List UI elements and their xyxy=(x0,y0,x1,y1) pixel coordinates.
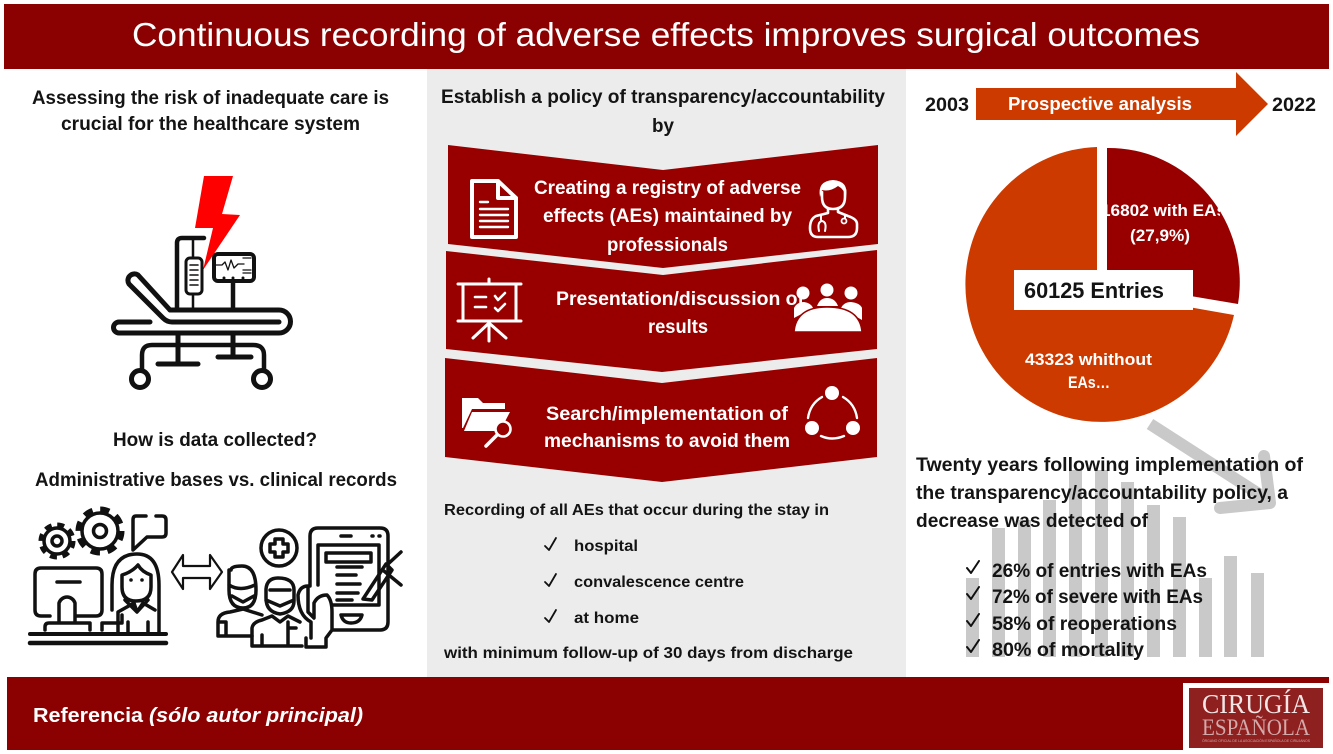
chevron: implementation of mechanisms: Search/implementation of xyxy=(546,404,789,425)
text block: recording of adverse effects: at home xyxy=(574,610,639,627)
panel: left column xyxy=(30,88,401,647)
chevron: registry of adverse effects: Creating a registry of adverse xyxy=(534,178,801,199)
heading: risk of inadequate care: Assessing the risk of inadequate care is xyxy=(32,88,389,109)
panel: right column xyxy=(916,72,1316,661)
text block: recording of adverse effects: with minimum follow-up of 30 days from discharge xyxy=(443,645,853,662)
list: decrease results: 72% of severe with EAs xyxy=(992,587,1203,608)
text block: twenty years decrease xyxy=(916,455,1304,532)
icon: document xyxy=(472,181,516,237)
list: decrease results xyxy=(967,561,1207,661)
title banner xyxy=(4,4,1329,69)
heading: transparency policy: by xyxy=(652,116,674,137)
label: total entries: 60125 Entries xyxy=(1024,278,1164,303)
label: with EAs: 16802 with EAs xyxy=(1101,202,1226,220)
pie slice: with EAs xyxy=(1107,148,1240,304)
chevron: presentation of results xyxy=(446,250,877,372)
panel: center background xyxy=(427,69,906,677)
text block: twenty years decrease: Twenty years following implementation of xyxy=(916,455,1304,476)
chevron: presentation of results: Presentation/discussion of xyxy=(556,289,805,310)
text block: twenty years decrease: decrease was detected of xyxy=(916,511,1149,532)
footer banner: Referencia (sólo autor principal) xyxy=(33,705,363,727)
panel: center column xyxy=(441,87,885,662)
footer banner xyxy=(7,677,1329,750)
text block: recording of adverse effects xyxy=(443,502,853,662)
text block: recording of adverse effects: Recording of all AEs that occur during the stay in xyxy=(444,502,829,519)
heading: transparency policy xyxy=(441,87,885,137)
timeline: prospective analysis arrow xyxy=(925,72,1316,136)
heading: risk of inadequate care xyxy=(32,88,389,135)
logo: Cirugía Española: ÓRGANO OFICIAL DE LA ASOCIACIÓN ESPAÑOLA DE CIRUJANOS xyxy=(1202,738,1310,743)
text block: recording of adverse effects: convalescence centre xyxy=(574,574,744,591)
label: without EAs: 43323 whithout xyxy=(1025,351,1153,369)
label: total entries xyxy=(1014,270,1193,310)
label: without EAs: EAs… xyxy=(1068,374,1110,392)
icon: doctor xyxy=(810,180,857,237)
chevron: registry of adverse effects: professionals xyxy=(607,235,728,256)
icon: surgeons with tablet record xyxy=(218,528,401,647)
icon: double-headed arrow xyxy=(172,555,222,589)
chevron: implementation of mechanisms: mechanisms to avoid them xyxy=(544,431,790,452)
logo: Cirugía Española: CIRUGÍA xyxy=(1202,689,1310,719)
timeline: prospective analysis arrow: 2022 xyxy=(1272,95,1316,116)
list: decrease results: 26% of entries with EAs xyxy=(992,561,1207,582)
timeline: prospective analysis arrow: 2003 xyxy=(925,95,969,116)
chevron: presentation of results: results xyxy=(648,317,708,338)
chart: trend bars watermark xyxy=(966,424,1270,657)
logo: Cirugía Española xyxy=(1183,683,1329,750)
label: without EAs xyxy=(1025,351,1153,392)
heading: risk of inadequate care: crucial for the healthcare system xyxy=(61,114,360,135)
list: decrease results: 80% of mortality xyxy=(992,640,1144,661)
icon: hospital bed with lightning bolt xyxy=(114,176,290,388)
list: decrease results: 58% of reoperations xyxy=(992,614,1177,635)
heading: administrative bases vs clinical records: Administrative bases vs. clinical records xyxy=(35,470,397,491)
text block: recording of adverse effects: hospital xyxy=(574,538,638,555)
chevron: registry of adverse effects xyxy=(448,145,878,268)
heading: how is data collected: How is data collected? xyxy=(113,430,317,451)
icon: meeting around table xyxy=(794,284,862,332)
heading: transparency policy: Establish a policy of transparency/accountability xyxy=(441,87,885,108)
icon: administrative worker at computer xyxy=(30,510,166,643)
timeline: prospective analysis arrow: Prospective analysis xyxy=(1008,94,1192,114)
icon: presentation board xyxy=(458,279,521,341)
label: with EAs: (27,9%) xyxy=(1130,227,1190,245)
chart: entries pie xyxy=(965,147,1240,422)
icon: cycle network xyxy=(805,386,860,438)
icon: folder with magnifier xyxy=(462,398,510,446)
pie slice: without EAs xyxy=(965,147,1234,422)
label: with EAs xyxy=(1107,204,1220,244)
chevron: registry of adverse effects: effects (AEs) maintained by xyxy=(543,206,792,227)
chevron: implementation of mechanisms xyxy=(445,358,877,482)
title banner: Continuous recording of adverse effects improves surgical outcomes xyxy=(132,16,1200,53)
text block: twenty years decrease: the transparency/accountability policy, a xyxy=(916,483,1288,504)
logo: Cirugía Española: ESPAÑOLA xyxy=(1202,715,1310,740)
